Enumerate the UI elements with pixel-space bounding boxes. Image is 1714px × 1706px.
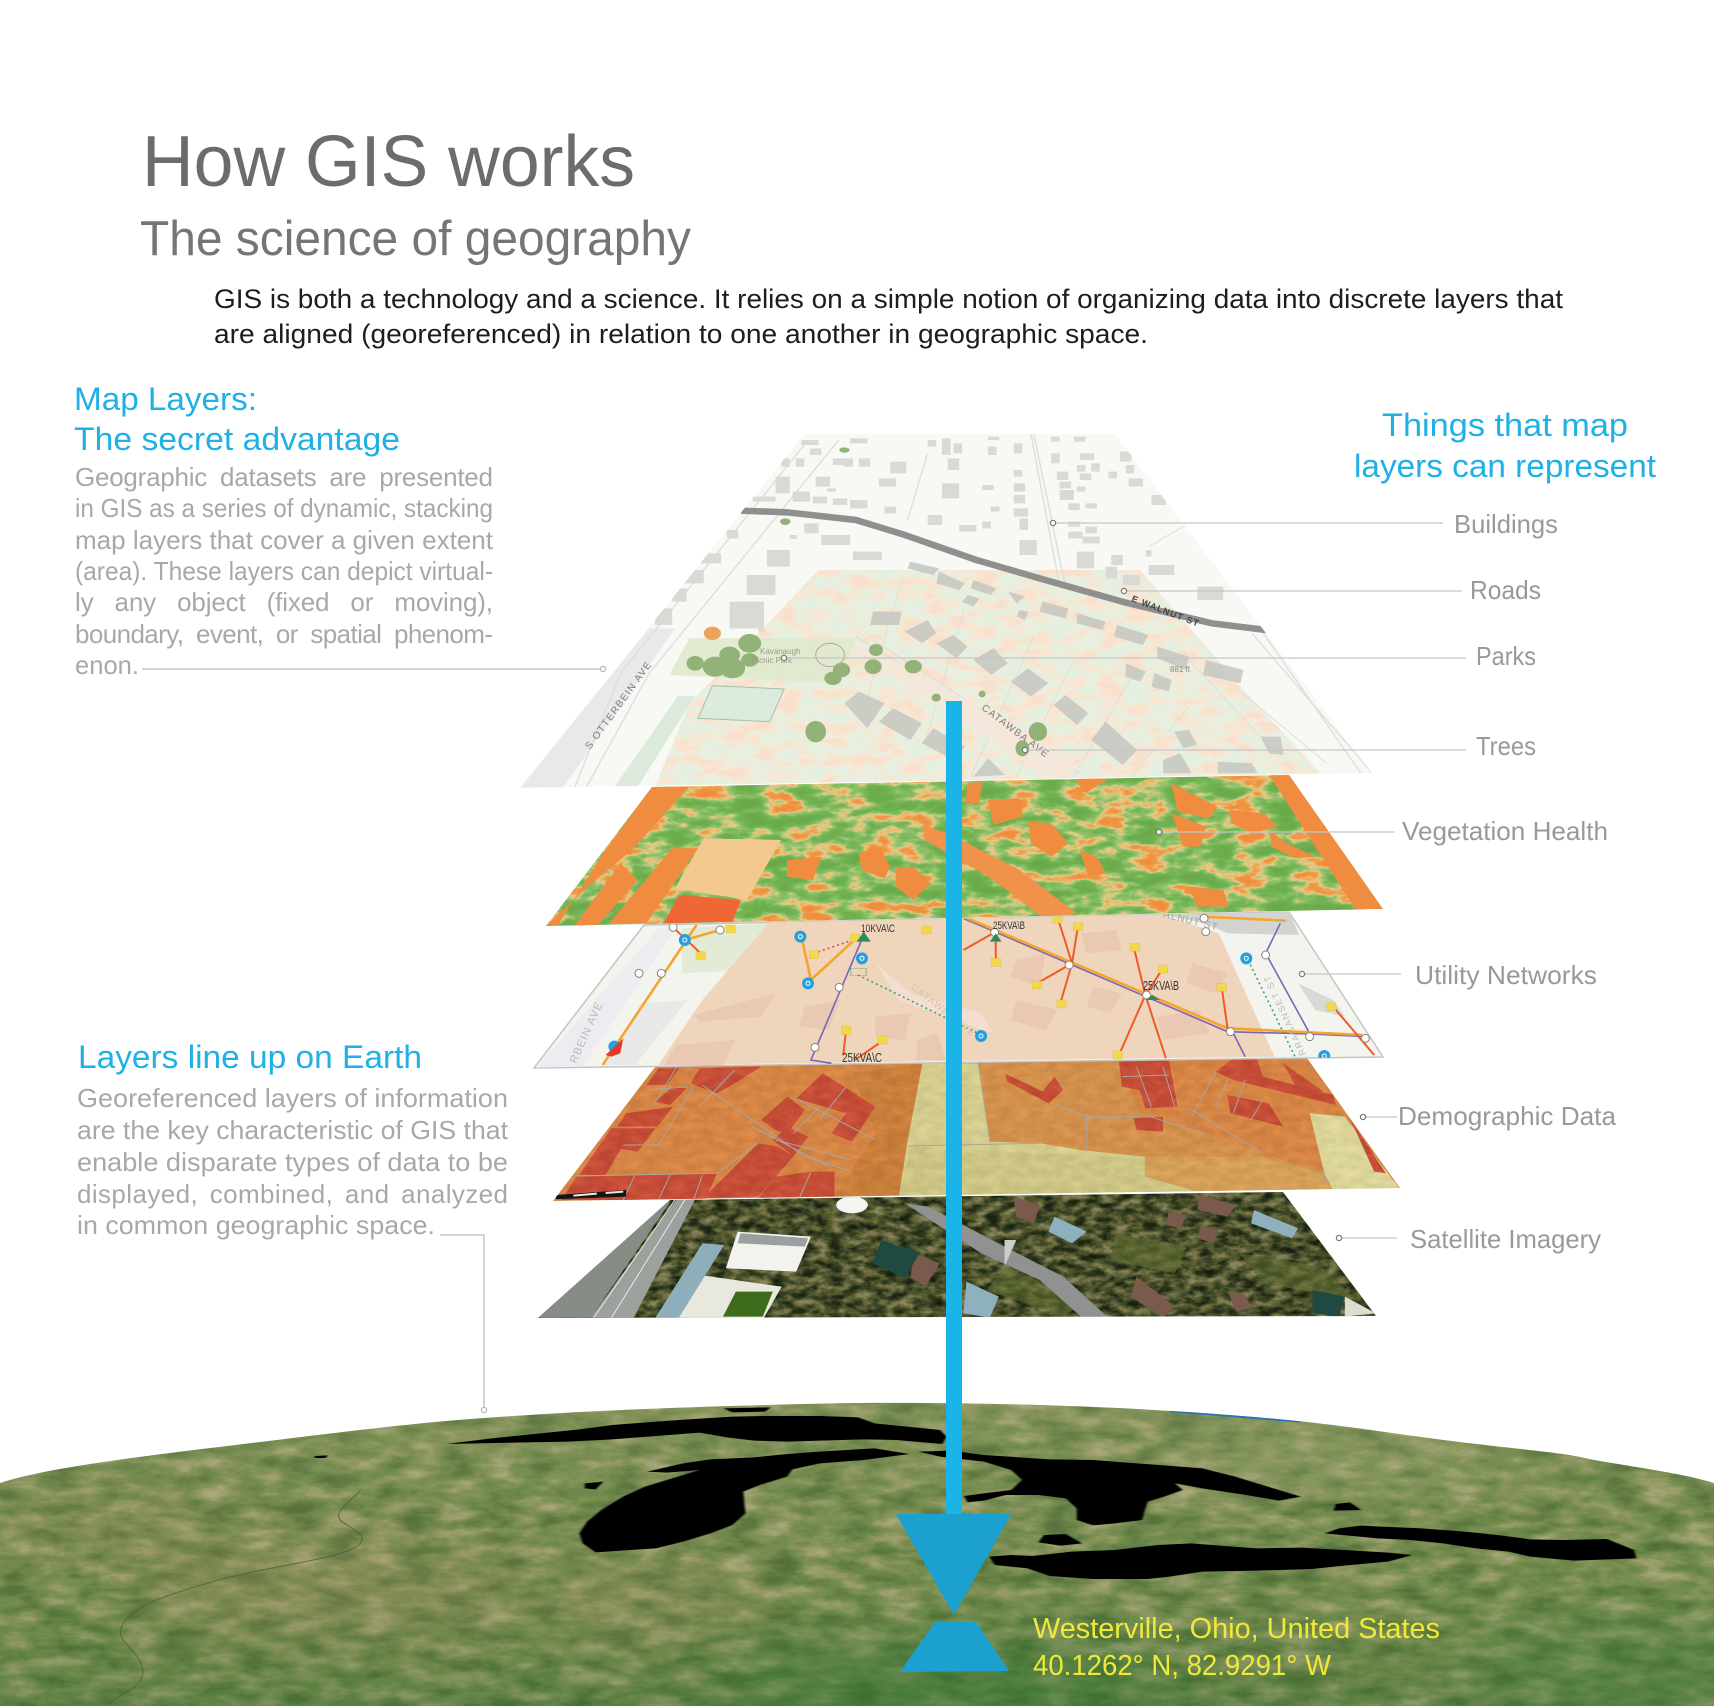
side road — [520, 628, 675, 788]
transformer labels: 25KVA\B — [993, 920, 1025, 932]
text block: map layers description: map layers that cover a given extent — [75, 525, 494, 555]
red service lines — [673, 917, 1374, 1060]
label: parks — [781, 641, 1536, 671]
building footprints — [664, 930, 1228, 1065]
label: vegetation health: Vegetation Health — [1402, 816, 1608, 846]
dotted green line — [858, 960, 1295, 1057]
park tint — [682, 923, 770, 973]
white school building — [726, 1232, 811, 1272]
layer: satellite imagery — [538, 1192, 1376, 1318]
connector: map layers text to layers — [142, 666, 606, 672]
great lakes — [315, 1407, 1636, 1579]
text block: map layers description: boundary, event, or spatial phenom- — [75, 619, 493, 649]
yellow transformer markers — [696, 915, 1336, 1059]
title: How GIS works — [142, 122, 635, 202]
street labels on utility layer: ALNUT ST — [1162, 909, 1219, 934]
label: buildings — [1050, 509, 1558, 539]
aerial imagery showing through demographic layer — [550, 1050, 1410, 1205]
medium orange right block — [978, 1062, 1327, 1192]
grass patches — [1110, 1233, 1186, 1273]
connector: layers line up text to earth — [440, 1235, 487, 1413]
street labels on utility layer: RBEIN AVE — [568, 1000, 606, 1065]
heading: map layers: Map Layers: — [74, 381, 257, 417]
arrow: downward line and triangles to location — [896, 701, 1011, 1672]
transformer labels: 25KVA\B — [1143, 978, 1179, 993]
scale bar — [556, 1190, 626, 1199]
road at top right — [1160, 912, 1299, 935]
heading: things that map layers represent: layers can represent — [1354, 448, 1656, 484]
layer: utility networks — [534, 909, 1383, 1068]
layer: base map with buildings, roads, parks, trees: CATAWBA AVE — [979, 703, 1051, 761]
label: parks: Parks — [1476, 641, 1536, 671]
location label — [1033, 1613, 1440, 1682]
label: buildings: Buildings — [1454, 509, 1558, 539]
text block: map layers description — [75, 462, 494, 680]
text block: layers line up description: enable disparate types of data to be — [77, 1147, 508, 1177]
blue device markers — [614, 937, 1324, 1056]
layer: base map with buildings, roads, parks, trees: 881 ft — [1170, 665, 1191, 674]
heading: layers line up: Layers line up on Earth — [78, 1039, 422, 1075]
street labels on base map: E WALNUT ST — [1130, 594, 1201, 629]
globe: earth satellite view — [0, 1395, 1714, 1706]
intro paragraph: GIS is both a technology and a science. It relies on a simple notion of organizing data into discrete layers that — [214, 284, 1564, 314]
label: trees — [1022, 731, 1536, 761]
street labels on utility layer: RRAGANSET ST — [1262, 973, 1308, 1057]
purple lines — [811, 918, 1368, 1063]
green institutional footprints — [698, 686, 784, 722]
trees — [687, 447, 1047, 756]
road strip — [536, 1066, 582, 1068]
text block: layers line up description: Georeferenced layers of information — [77, 1083, 508, 1113]
intro paragraph — [214, 284, 1564, 349]
buildings: south blocks — [844, 562, 1284, 777]
houses — [911, 1195, 1251, 1318]
orange lines — [603, 917, 1362, 1065]
text block: map layers description: Geographic datasets are presented — [75, 462, 493, 492]
red block — [664, 895, 741, 923]
red high value parcels — [562, 1058, 1386, 1200]
label: vegetation health — [1156, 816, 1608, 846]
label: demographic data: Demographic Data — [1398, 1101, 1617, 1131]
transformer labels — [842, 920, 1179, 1065]
pale yellow low value area — [899, 1063, 1198, 1196]
text block: map layers description: in GIS as a series of dynamic, stacking — [75, 493, 493, 523]
text block: map layers description: enon. — [75, 650, 139, 680]
curved street — [905, 1203, 1107, 1317]
text block: layers line up description: in common geographic space. — [77, 1210, 435, 1240]
layer: base map with buildings, roads, parks, trees — [520, 434, 1380, 800]
location label: 40.1262° N, 82.9291° W — [1033, 1650, 1332, 1682]
peach overlay — [658, 914, 1274, 1065]
text block: layers line up description — [77, 1083, 509, 1240]
transformer labels: 25KVA\C — [842, 1050, 882, 1065]
road: walnut street — [741, 511, 1266, 630]
label: trees: Trees — [1476, 731, 1536, 761]
text block: map layers description: (area). These layers can depict virtual- — [75, 556, 493, 586]
layer: base map with buildings, roads, parks, trees: S OTTERBEIN AVE — [584, 659, 655, 752]
heading: things that map layers represent: Things that map — [1382, 407, 1628, 443]
green arrows — [857, 932, 1160, 1000]
layer: base map with buildings, roads, parks, trees: Kavanaugh — [760, 647, 800, 656]
text block: layers line up description: are the key characteristic of GIS that — [77, 1115, 509, 1145]
layer: demographic data — [550, 1050, 1410, 1205]
subtitle: The science of geography — [140, 212, 691, 266]
heading: things that map layers represent — [1354, 407, 1656, 484]
layer: vegetation health — [540, 770, 1390, 930]
text block: map layers description: ly any object (fixed or moving), — [75, 587, 493, 617]
white node markers — [639, 918, 1365, 1047]
darker central orange block — [834, 1063, 922, 1197]
edge of ocean — [1170, 1411, 1301, 1422]
street labels on utility layer: CATAWBA AVE — [908, 982, 978, 1039]
label: satellite imagery: Satellite Imagery — [1410, 1224, 1601, 1254]
diagonal orange street — [922, 825, 1077, 920]
label: roads: Roads — [1470, 575, 1541, 605]
layer: base map with buildings, roads, parks, trees: Picnic Park — [752, 656, 793, 665]
heading: map layers — [74, 381, 400, 457]
left road corridor — [538, 1202, 670, 1318]
intro paragraph: are aligned (georeferenced) in relation to one another in geographic space. — [214, 319, 1148, 349]
heading: map layers: The secret advantage — [74, 421, 400, 457]
text block: layers line up description: displayed, combined, and analyzed — [77, 1179, 508, 1209]
orange edges — [546, 775, 1383, 926]
label: roads — [1121, 575, 1541, 605]
street lines — [575, 434, 1372, 788]
pale yellow corner — [1310, 1113, 1399, 1190]
label: utility networks: Utility Networks — [1415, 960, 1597, 990]
park — [669, 638, 856, 683]
catawba parkway — [850, 647, 1074, 775]
buildings: north blocks — [655, 437, 1223, 632]
location label: Westerville, Ohio, United States — [1033, 1613, 1440, 1645]
street labels on utility layer — [568, 909, 1308, 1065]
transformer labels: 10KVA\C — [861, 923, 895, 935]
river — [109, 1490, 362, 1703]
pale school grounds — [675, 838, 781, 900]
label: utility networks — [1299, 960, 1597, 990]
parcel boundaries — [576, 1063, 1327, 1200]
